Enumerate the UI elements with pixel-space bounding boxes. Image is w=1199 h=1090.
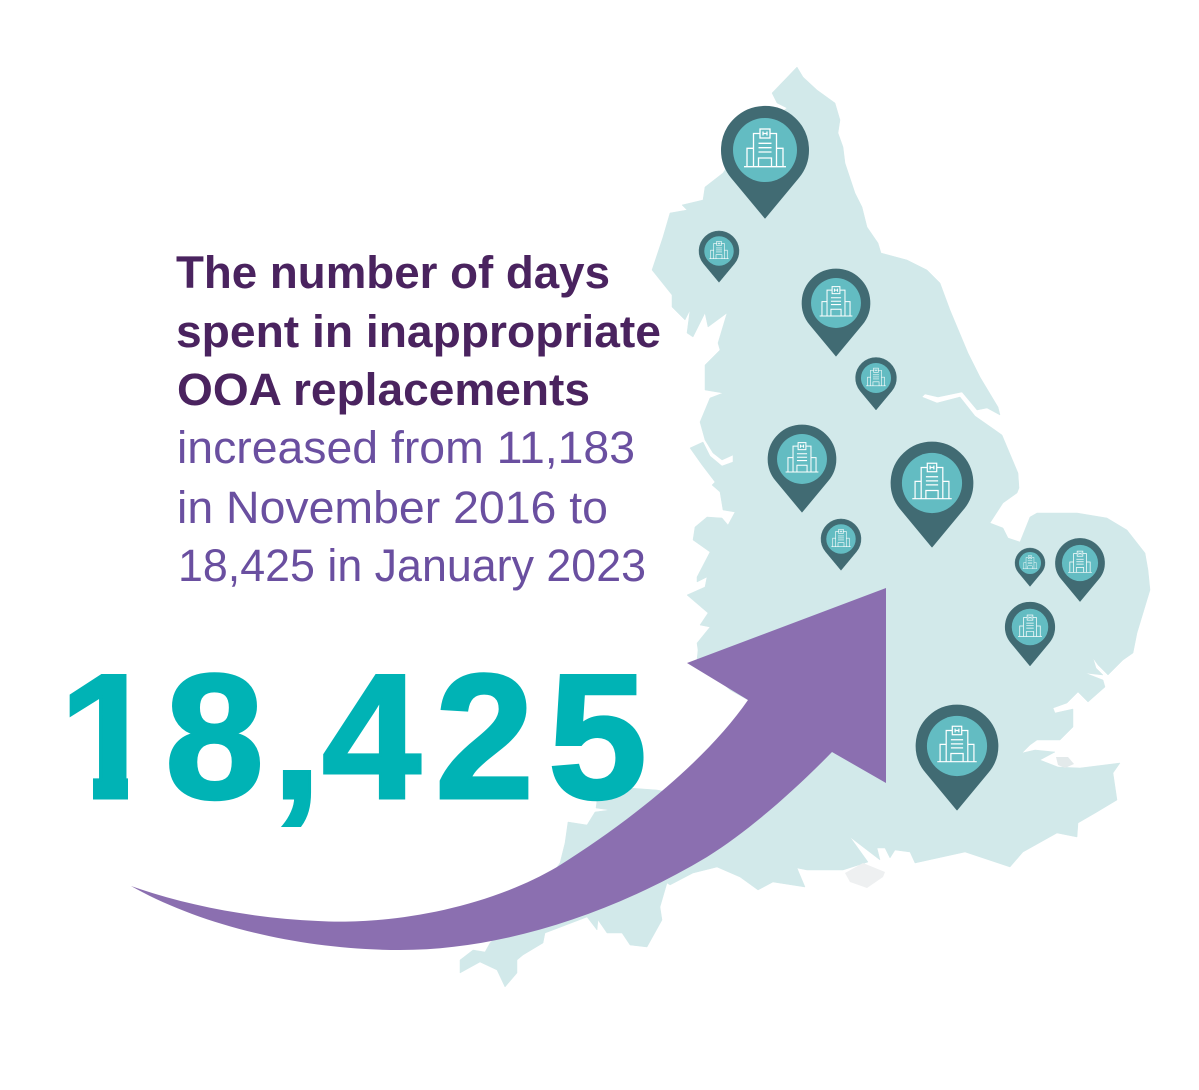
map of England <box>460 67 1150 987</box>
location pin: south large <box>916 705 998 810</box>
location pin: west midlands small <box>821 519 861 570</box>
rising arrow <box>131 588 886 950</box>
heading: bold statement: spent in inappropriate <box>176 306 661 357</box>
location pin: Cumbria small <box>699 231 739 282</box>
location pin: north large <box>722 106 808 218</box>
location pin: Norfolk <box>1055 538 1105 601</box>
location pin: Yorkshire medium <box>802 269 870 356</box>
Isle of Sheppey <box>1056 757 1074 768</box>
heading: bold statement: The number of days <box>176 247 610 298</box>
location pin: Yorkshire small <box>856 358 896 410</box>
text block: increase detail: increased from 11,183 <box>177 422 635 473</box>
big number: 18,425: 18,425 <box>59 637 647 836</box>
Isle of Wight <box>845 863 885 888</box>
location pin: north west medium <box>768 425 836 512</box>
location pin: midlands large <box>891 442 973 547</box>
text block: increase detail: in November 2016 to <box>177 482 608 533</box>
heading: bold statement: OOA replacements <box>177 364 590 415</box>
location pin: Suffolk <box>1005 602 1055 666</box>
location pin: East Anglia smallest <box>1015 548 1045 586</box>
text block: increase detail: 18,425 in January 2023 <box>178 540 646 591</box>
